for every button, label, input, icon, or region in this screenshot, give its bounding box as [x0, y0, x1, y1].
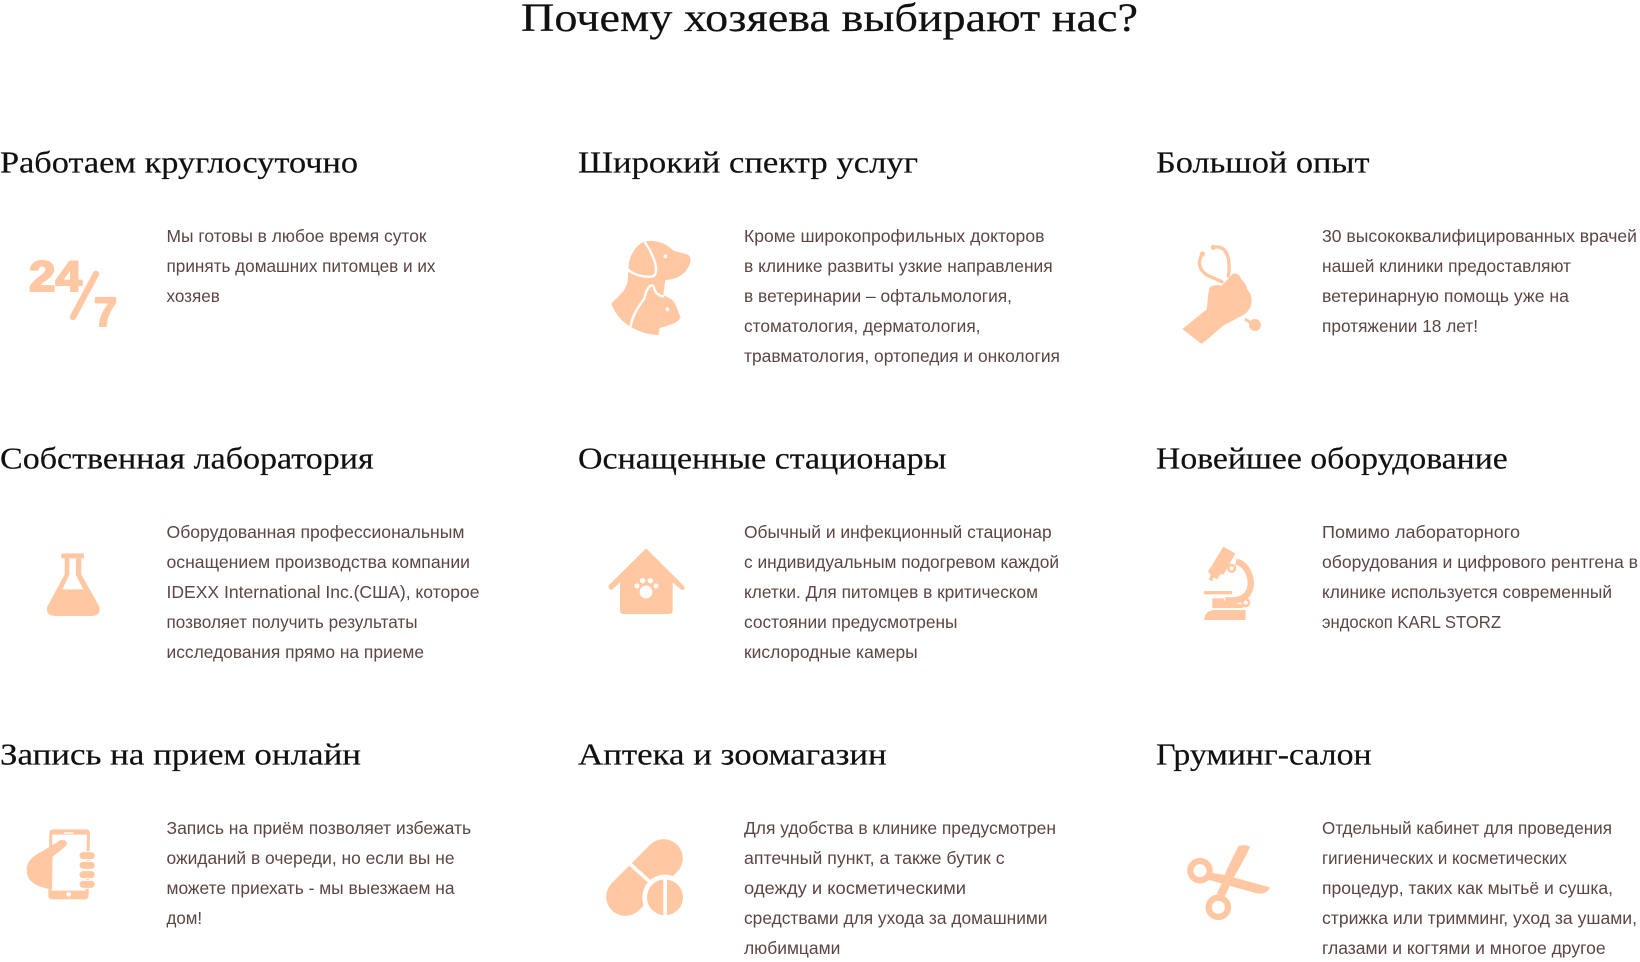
icon: 24/7 — [29, 253, 117, 335]
icon: flask — [47, 553, 100, 616]
text block: одежду и косметическими — [744, 878, 966, 898]
icon: 24/7: 24 — [29, 253, 82, 301]
text block: глазами и когтями и многое другое — [1322, 938, 1606, 958]
text block: Запись на приём позволяет избежать — [166, 818, 471, 838]
panel: hospital — [578, 440, 1059, 662]
text block: в ветеринарии – офтальмология, — [744, 286, 1012, 306]
heading: experience: Большой опыт — [1156, 144, 1370, 180]
panel: grooming — [1156, 736, 1637, 958]
text block: исследования прямо на приеме — [166, 642, 424, 662]
text block: клинике используется современный — [1322, 582, 1612, 602]
text block: Оборудованная профессиональным — [166, 522, 464, 542]
panel: laboratory — [0, 440, 480, 662]
text block — [166, 818, 471, 928]
text block — [1322, 226, 1637, 336]
panel: 24/7 — [0, 144, 436, 335]
text block: Отдельный кабинет для проведения — [1322, 818, 1612, 838]
text block: можете приехать - мы выезжаем на — [166, 878, 455, 898]
text block: Кроме широкопрофильных докторов — [744, 226, 1044, 246]
text block: состоянии предусмотрены — [744, 612, 958, 632]
panel: equipment — [1156, 440, 1638, 632]
heading: grooming: Груминг-салон — [1156, 736, 1372, 772]
text block: эндоскоп KARL STORZ — [1322, 612, 1501, 632]
text block: нашей клиники предоставляют — [1322, 256, 1571, 276]
text block — [744, 226, 1060, 366]
text block — [744, 522, 1059, 662]
text block: позволяет получить результаты — [166, 612, 418, 632]
text block: любимцами — [744, 938, 840, 958]
text block: процедур, таких как мытьё и сушка, — [1322, 878, 1613, 898]
text block: оборудования и цифрового рентгена в — [1322, 552, 1638, 572]
heading: hospital: Оснащенные стационары — [578, 440, 947, 476]
panel: pharmacy — [578, 736, 1056, 958]
heading: services: Широкий спектр услуг — [578, 144, 918, 180]
text block: стрижка или тримминг, уход за ушами, — [1322, 908, 1637, 928]
text block: Мы готовы в любое время суток — [166, 226, 427, 246]
text block: IDEXX International Inc.(США), которое — [166, 582, 480, 602]
text block — [1322, 818, 1637, 958]
text block: стоматология, дерматология, — [744, 316, 980, 336]
text block: кислородные камеры — [744, 642, 918, 662]
panel: services — [578, 144, 1060, 366]
text block: аптечный пункт, а также бутик с — [744, 848, 1005, 868]
text block: средствами для ухода за домашними — [744, 908, 1048, 928]
icon: house with paw — [609, 549, 684, 614]
text block — [166, 226, 436, 306]
text block: хозяев — [166, 286, 220, 306]
text block: гигиенических и косметических — [1322, 848, 1567, 868]
heading: online booking: Запись на прием онлайн — [0, 736, 361, 772]
text block: травматология, ортопедия и онкология — [744, 346, 1060, 366]
icon: pills — [625, 858, 688, 920]
text block: клетки. Для питомцев в критическом — [744, 582, 1038, 602]
text block: дом! — [166, 908, 202, 928]
panel: online booking — [0, 736, 471, 928]
text block — [1322, 522, 1638, 632]
text block: принять домашних питомцев и их — [166, 256, 436, 276]
icon: hand with stethoscope — [1182, 245, 1261, 344]
icon: dog and cat — [611, 240, 691, 335]
text block: протяжении 18 лет! — [1322, 316, 1478, 336]
text block: с индивидуальным подогревом каждой — [744, 552, 1059, 572]
text block: Обычный и инфекционный стационар — [744, 522, 1052, 542]
text block: ветеринарную помощь уже на — [1322, 286, 1569, 306]
heading: laboratory: Собственная лаборатория — [0, 440, 374, 476]
heading: pharmacy: Аптека и зоомагазин — [578, 736, 887, 772]
text block: 30 высококвалифицированных врачей — [1322, 226, 1637, 246]
icon: microscope — [1204, 547, 1251, 620]
text block: Для удобства в клинике предусмотрен — [744, 818, 1056, 838]
icon: 24/7: 7 — [94, 289, 117, 335]
icon: hand holding phone — [27, 829, 95, 899]
panel: experience — [1156, 144, 1637, 344]
text block: ожиданий в очереди, но если вы не — [166, 848, 454, 868]
text block — [166, 522, 480, 662]
icon: scissors — [1190, 845, 1270, 917]
text block — [744, 818, 1056, 958]
text block: в клинике развиты узкие направления — [744, 256, 1053, 276]
heading: 24/7: Работаем круглосуточно — [0, 144, 358, 180]
text block: оснащением производства компании — [166, 552, 470, 572]
heading: equipment: Новейшее оборудование — [1156, 440, 1508, 476]
text block: Помимо лабораторного — [1322, 522, 1520, 542]
